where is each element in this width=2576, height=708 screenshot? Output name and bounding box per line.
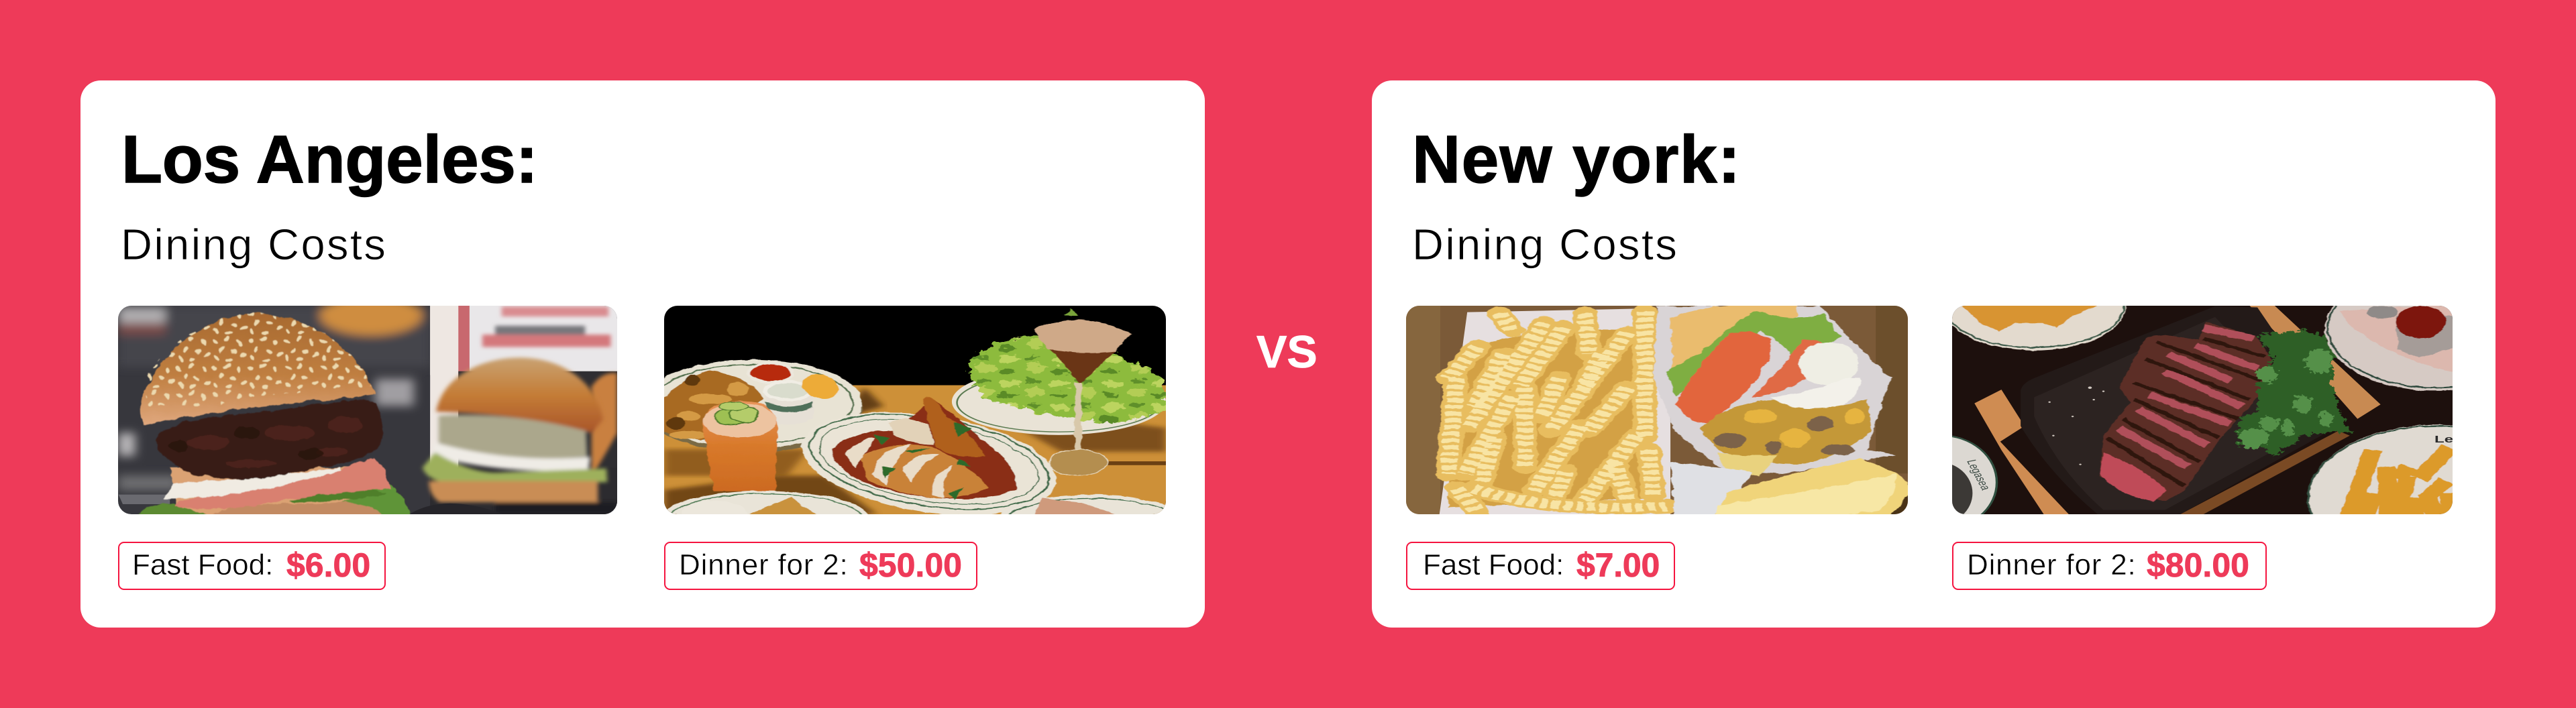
- steak slices: [2100, 322, 2273, 501]
- appetizer plate: [642, 360, 863, 453]
- heading: New York: New york:: [1412, 122, 1741, 197]
- price tag: fast food: $6.00: [286, 546, 370, 584]
- bottom plates: [663, 491, 868, 544]
- brand text on rim: Legasea: [1964, 459, 1993, 491]
- price tag: fast food: [1406, 542, 1675, 590]
- price tag: dinner for two: [1952, 542, 2267, 590]
- photo: sliced steak: [1952, 306, 2453, 514]
- price tag: fast food: Fast Food:: [132, 548, 273, 581]
- price tag: fast food: [118, 542, 386, 590]
- price tag: fast food: Fast Food:: [1423, 548, 1564, 581]
- skillet: [2021, 306, 2339, 514]
- versus label: VS: [1256, 327, 1318, 377]
- chicken plate: [775, 393, 1083, 535]
- watercress: [2238, 330, 2352, 457]
- salad plate: [952, 368, 1166, 435]
- wooden board and handles: [2250, 306, 2381, 419]
- bottom left plate: [1886, 435, 1998, 530]
- photo: restaurant dinner spread: [664, 306, 1166, 514]
- panel: Los Angeles: [80, 80, 1205, 628]
- drink: [702, 401, 777, 491]
- price tag: dinner for two: Dinner for 2:: [1967, 548, 2137, 581]
- photo: crinkle fries and burger: [1406, 306, 1908, 514]
- price tag: dinner for two: $80.00: [2147, 546, 2249, 584]
- burger behind: [423, 357, 617, 514]
- price tag: dinner for two: $50.00: [859, 546, 962, 584]
- martini: [1065, 308, 1078, 316]
- price tag: dinner for two: [664, 542, 977, 590]
- subheading: dining costs: Dining Costs: [121, 220, 387, 269]
- photo: burgers: [118, 306, 617, 514]
- bottom right plate with fries: [2308, 425, 2565, 571]
- panel: New York: [1372, 80, 2496, 628]
- price tag: fast food: $7.00: [1576, 546, 1660, 584]
- subheading: dining costs: Dining Costs: [1412, 220, 1678, 269]
- price tag: dinner for two: Dinner for 2:: [679, 548, 849, 581]
- burger in front: [410, 504, 504, 514]
- top right plate and ramekin: [2324, 267, 2544, 391]
- heading: Los Angeles: Los Angeles:: [121, 122, 538, 197]
- top left plate: [1942, 259, 2127, 351]
